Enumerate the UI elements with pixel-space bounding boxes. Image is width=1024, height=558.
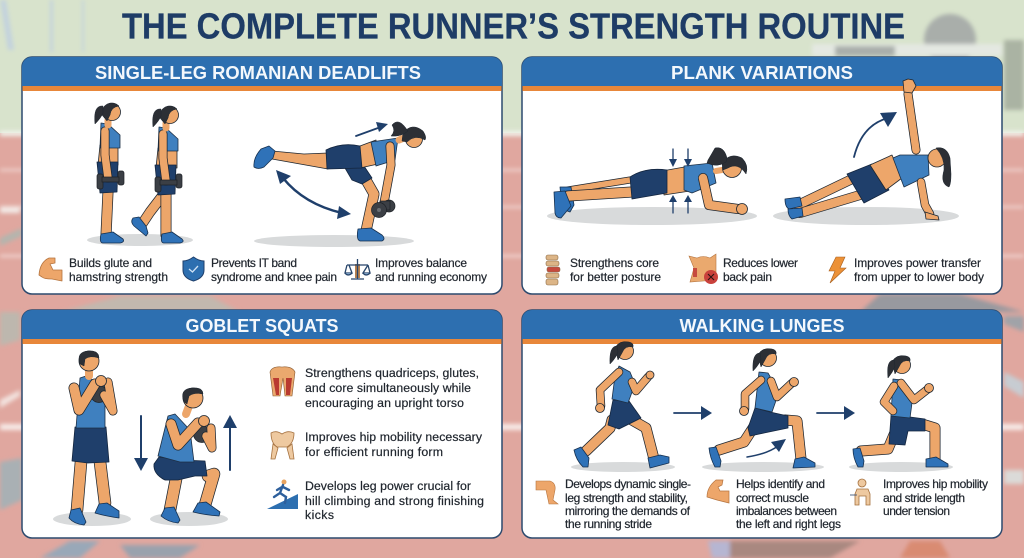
benefit text: strengthens quadriceps: encouraging an upright torso (305, 396, 464, 410)
benefit text: stride length: and stride length (883, 491, 965, 505)
benefit text: stride length: Improves hip mobility (883, 477, 988, 491)
figure: standing woman with dumbbells (95, 103, 124, 243)
benefit text: leg power: kicks (305, 508, 334, 522)
arrow: rotate upward (854, 112, 897, 157)
icon: spine (546, 255, 560, 285)
benefit text: dynamic strength: the running stride (565, 517, 652, 531)
benefit text: dynamic strength: mirroring the demands of (565, 504, 691, 518)
panel: plank variations (522, 57, 1002, 294)
figure: woman in single-leg deadlift (254, 122, 426, 241)
benefit text: leg power: Develops leg power crucial for (305, 479, 471, 493)
ground shadow: side plank (773, 207, 959, 225)
panel header: deadlifts: SINGLE-LEG ROMANIAN DEADLIFTS (95, 63, 421, 83)
panel: goblet squats (22, 310, 502, 538)
icon: balance scales (345, 259, 370, 279)
benefit text: muscle imbalances: the left and right legs (736, 517, 841, 531)
benefit text: reduces back pain: Reduces lower (723, 256, 798, 270)
panel: walking lunges (522, 310, 1002, 538)
arrow: step two (817, 406, 855, 420)
panel header: lunges (522, 310, 1002, 344)
panel: single-leg romanian deadlifts (22, 57, 502, 294)
ground shadow: standing figures (87, 234, 193, 246)
panel header: goblet squats (22, 310, 502, 344)
figure: side plank (785, 79, 951, 220)
benefit text: muscle imbalances: Helps identify and (736, 477, 825, 491)
figure: woman stepping back with dumbbells (132, 106, 183, 243)
benefit text: strengthens core: Strengthens core (570, 256, 659, 270)
figure: woman in mid lunge (709, 349, 815, 468)
icon: bent leg (536, 481, 558, 504)
benefit text: power transfer: Improves power transfer (854, 256, 981, 270)
panel header: plank: PLANK VARIATIONS (671, 63, 853, 83)
benefit text: prevents IT band: Prevents IT band (211, 256, 297, 270)
panel header: deadlifts (22, 57, 502, 91)
benefit text: reduces back pain: back pain (723, 270, 772, 284)
icon: shield (183, 257, 204, 281)
figure: man holding kettlebell (69, 351, 119, 525)
benefit text: leg power: hill climbing and strong finishing (305, 494, 484, 508)
icon: lower back with cross (689, 254, 718, 284)
ground shadow: lunge middle (702, 462, 824, 472)
icon: lightning bolt (829, 257, 846, 283)
arrow: squat down (134, 416, 148, 471)
arrow: stand up (223, 415, 237, 470)
arrow: raise torso (356, 122, 388, 136)
icon: pelvis (271, 432, 294, 459)
figure: woman in deep lunge (853, 356, 948, 467)
arrow: push forward (747, 439, 786, 457)
figure: man in squat with kettlebell (154, 388, 220, 523)
benefit text: dynamic strength: leg strength and stability, (565, 491, 688, 505)
ground shadow: deep lunge (849, 462, 953, 472)
arrow: step one (674, 406, 712, 420)
benefit text: strengthens core: for better posture (570, 270, 661, 284)
benefit text: builds strength: Builds glute and (69, 256, 152, 270)
panel header: plank (522, 57, 1002, 91)
figure: woman striding (574, 342, 669, 468)
panel header: lunges: WALKING LUNGES (680, 316, 844, 336)
benefit text: improves balance: Improves balance (375, 256, 467, 270)
benefit text: strengthens quadriceps: and core simultaneously while (305, 381, 471, 395)
arrow: double-headed swing (276, 170, 351, 219)
benefit text: prevents IT band: syndrome and knee pain (211, 270, 337, 284)
ground shadow: forearm plank (547, 207, 757, 225)
benefit text: strengthens quadriceps: Strengthens quadriceps, glutes, (305, 366, 479, 380)
benefit text: hip mobility: Improves hip mobility necessary (305, 430, 483, 444)
icon: hip and legs (850, 479, 870, 505)
benefit text: hip mobility: for efficient running form (305, 445, 443, 459)
ground shadow: stride (571, 462, 675, 472)
icon: runner on hill (267, 480, 298, 509)
benefit text: muscle imbalances: imbalances between (736, 504, 837, 518)
icon: flexed biceps (39, 258, 62, 281)
benefit text: builds strength: hamstring strength (69, 270, 168, 284)
benefit text: stride length: under tension (883, 504, 950, 518)
panel header: goblet squats: GOBLET SQUATS (186, 316, 338, 336)
figure: forearm plank (554, 148, 748, 218)
title: THE COMPLETE RUNNER’S STRENGTH ROUTINE (122, 6, 905, 46)
ground shadow: standing man (53, 512, 131, 526)
ground shadow: deadlift (254, 235, 414, 247)
benefit text: dynamic strength: Develops dynamic single- (565, 477, 691, 491)
ground shadow: squatting man (150, 512, 228, 526)
arrows: core compression (669, 149, 692, 213)
benefit text: improves balance: and running economy (375, 270, 487, 284)
icon: flexed arm (707, 480, 729, 503)
benefit text: power transfer: from upper to lower body (854, 270, 984, 284)
benefit text: muscle imbalances: correct muscle (736, 491, 809, 505)
icon: leg muscles (270, 367, 295, 396)
